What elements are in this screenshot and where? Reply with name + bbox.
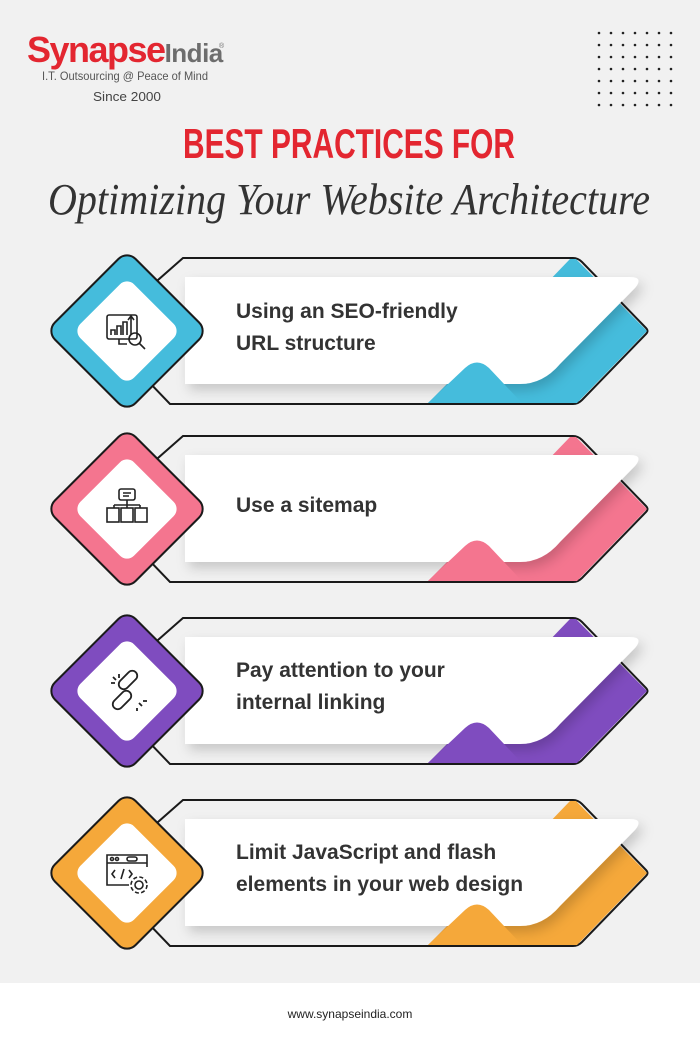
footer [0, 983, 700, 1050]
row 3: internal linking: internal linking [236, 691, 385, 714]
row 2: sitemap [46, 428, 647, 590]
diamond icon [46, 428, 208, 590]
logo: SynapseIndia [27, 29, 224, 70]
row 3: internal linking [46, 610, 647, 772]
title: BEST PRACTICES FOR [183, 120, 515, 167]
title: Optimizing Your Website Architecture [48, 175, 650, 224]
row 1: SEO-friendly URL: URL structure [236, 332, 376, 355]
row 4: limit JavaScript: elements in your web design [236, 873, 523, 896]
title [48, 120, 650, 224]
diamond icon [46, 250, 208, 412]
row 1: SEO-friendly URL [46, 250, 647, 412]
diamond icon [46, 792, 208, 954]
row 4: limit JavaScript [46, 792, 647, 954]
text: Pay attention to your [236, 659, 445, 682]
logo [27, 29, 225, 104]
logo: I.T. Outsourcing @ Peace of Mind [42, 69, 208, 83]
text: Limit JavaScript and flash [236, 841, 496, 864]
decorative dot grid [598, 32, 672, 106]
text: Using an SEO-friendly [236, 300, 458, 323]
text: Use a sitemap [236, 494, 377, 517]
diamond icon [46, 610, 208, 772]
logo: Since 2000 [93, 89, 161, 104]
logo: ® [219, 42, 225, 50]
footer: www.synapseindia.com [287, 1007, 412, 1021]
